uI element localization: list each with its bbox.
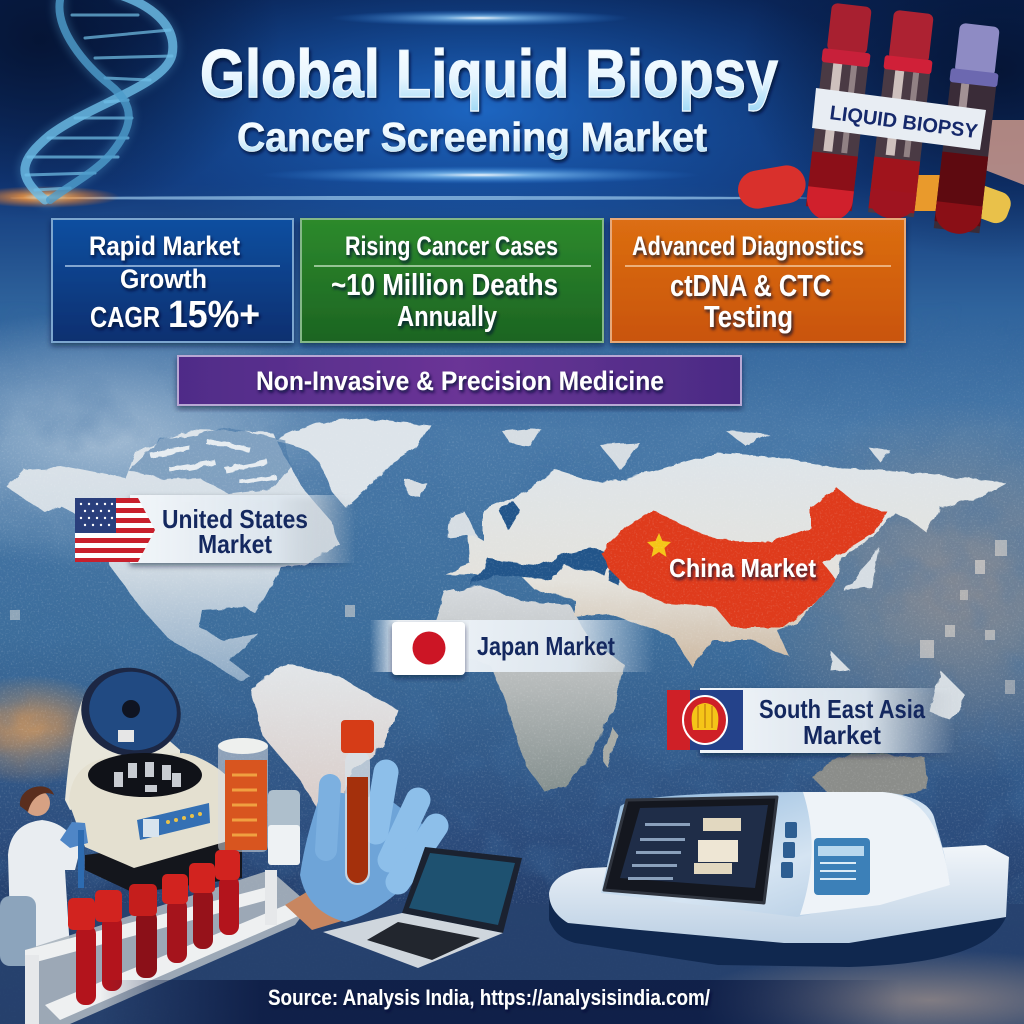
China region — [601, 487, 888, 627]
world map — [8, 418, 1006, 830]
panel: advanced diagnostics: Testing — [704, 299, 793, 334]
illustration: gloved hand holding tube — [285, 720, 436, 930]
panel: advanced diagnostics — [611, 219, 905, 342]
illustration: blood tubes with label — [735, 2, 1024, 236]
continent: Eurasia — [444, 453, 1006, 667]
panel: advanced diagnostics: Advanced Diagnostics — [632, 231, 864, 261]
panel: rapid market growth: Growth — [120, 264, 207, 294]
banner: United States: United States — [162, 504, 308, 534]
banner: Japan — [370, 620, 655, 675]
bokeh lights right — [10, 540, 1015, 694]
tube 3 — [932, 22, 1004, 236]
icon: China star — [647, 533, 671, 557]
source text: Source: Analysis India, https://analysisindia.com/ — [268, 985, 710, 1010]
continent: Madagascar — [602, 727, 618, 768]
inland seas — [470, 500, 622, 585]
panel: advanced diagnostics: ctDNA & CTC — [670, 268, 831, 303]
sample tubes — [68, 850, 240, 1005]
panel: rising cancer cases — [301, 219, 603, 342]
continent: Greenland — [274, 418, 431, 508]
subtitle: Cancer Screening Market — [237, 114, 707, 160]
illustration: analyzer instrument — [549, 792, 1009, 967]
analyzer main screen — [604, 797, 777, 903]
banner: Japan: Japan Market — [477, 631, 615, 661]
panel: rising cancer cases: Annually — [397, 301, 497, 333]
panel: non-invasive and precision medicine — [178, 356, 741, 405]
continent: Australia — [810, 752, 928, 800]
icon: DNA helix — [25, 0, 173, 200]
top light streaks — [0, 10, 810, 208]
continent: North America — [8, 430, 340, 680]
centrifuge lid — [73, 659, 189, 765]
source strip — [100, 980, 900, 1024]
table surface — [0, 904, 1024, 1024]
icon: US flag — [75, 498, 155, 563]
panel: rapid market growth: CAGR — [90, 302, 160, 334]
warm floor glow — [690, 950, 1024, 1024]
panel: rising cancer cases: ~10 Million Deaths — [331, 267, 558, 302]
tube 2 — [867, 9, 938, 221]
title: Global Liquid Biopsy — [200, 36, 778, 112]
panel: rapid market growth — [52, 219, 293, 342]
label: China Market: China Market — [669, 553, 816, 583]
continent: South America — [251, 663, 398, 830]
tube label text: LIQUID BIOPSY — [828, 102, 980, 143]
illustration: beakers — [218, 738, 300, 865]
icon: ASEAN flag — [667, 690, 743, 750]
sample tube — [341, 720, 374, 885]
icon: Japan flag — [392, 622, 465, 675]
illustration: sample rack — [25, 850, 312, 1024]
panel: rapid market growth: Rapid Market — [89, 231, 240, 261]
banner: South East Asia — [667, 688, 955, 753]
illustration: centrifuge — [65, 659, 242, 893]
tube label band — [812, 88, 986, 150]
continent: Africa — [435, 585, 625, 792]
analyzer side screen — [814, 838, 870, 895]
pills — [735, 120, 1024, 227]
illustration: laptop — [323, 847, 522, 968]
banner: United States — [75, 495, 355, 563]
Arctic islands dark overlay — [128, 428, 290, 495]
banner: United States: Market — [198, 529, 272, 559]
banner: South East Asia: South East Asia — [759, 694, 925, 724]
islands — [405, 428, 965, 720]
banner: South East Asia: Market — [803, 720, 881, 750]
speckle texture — [0, 354, 1024, 904]
illustration: scientist — [0, 786, 88, 966]
tube 1 — [804, 2, 876, 223]
panel: rapid market growth: 15%+ — [168, 294, 260, 336]
title — [200, 36, 778, 160]
panel: non-invasive and precision medicine: Non-Invasive & Precision Medicine — [256, 366, 664, 396]
panel: rising cancer cases: Rising Cancer Cases — [345, 231, 558, 261]
